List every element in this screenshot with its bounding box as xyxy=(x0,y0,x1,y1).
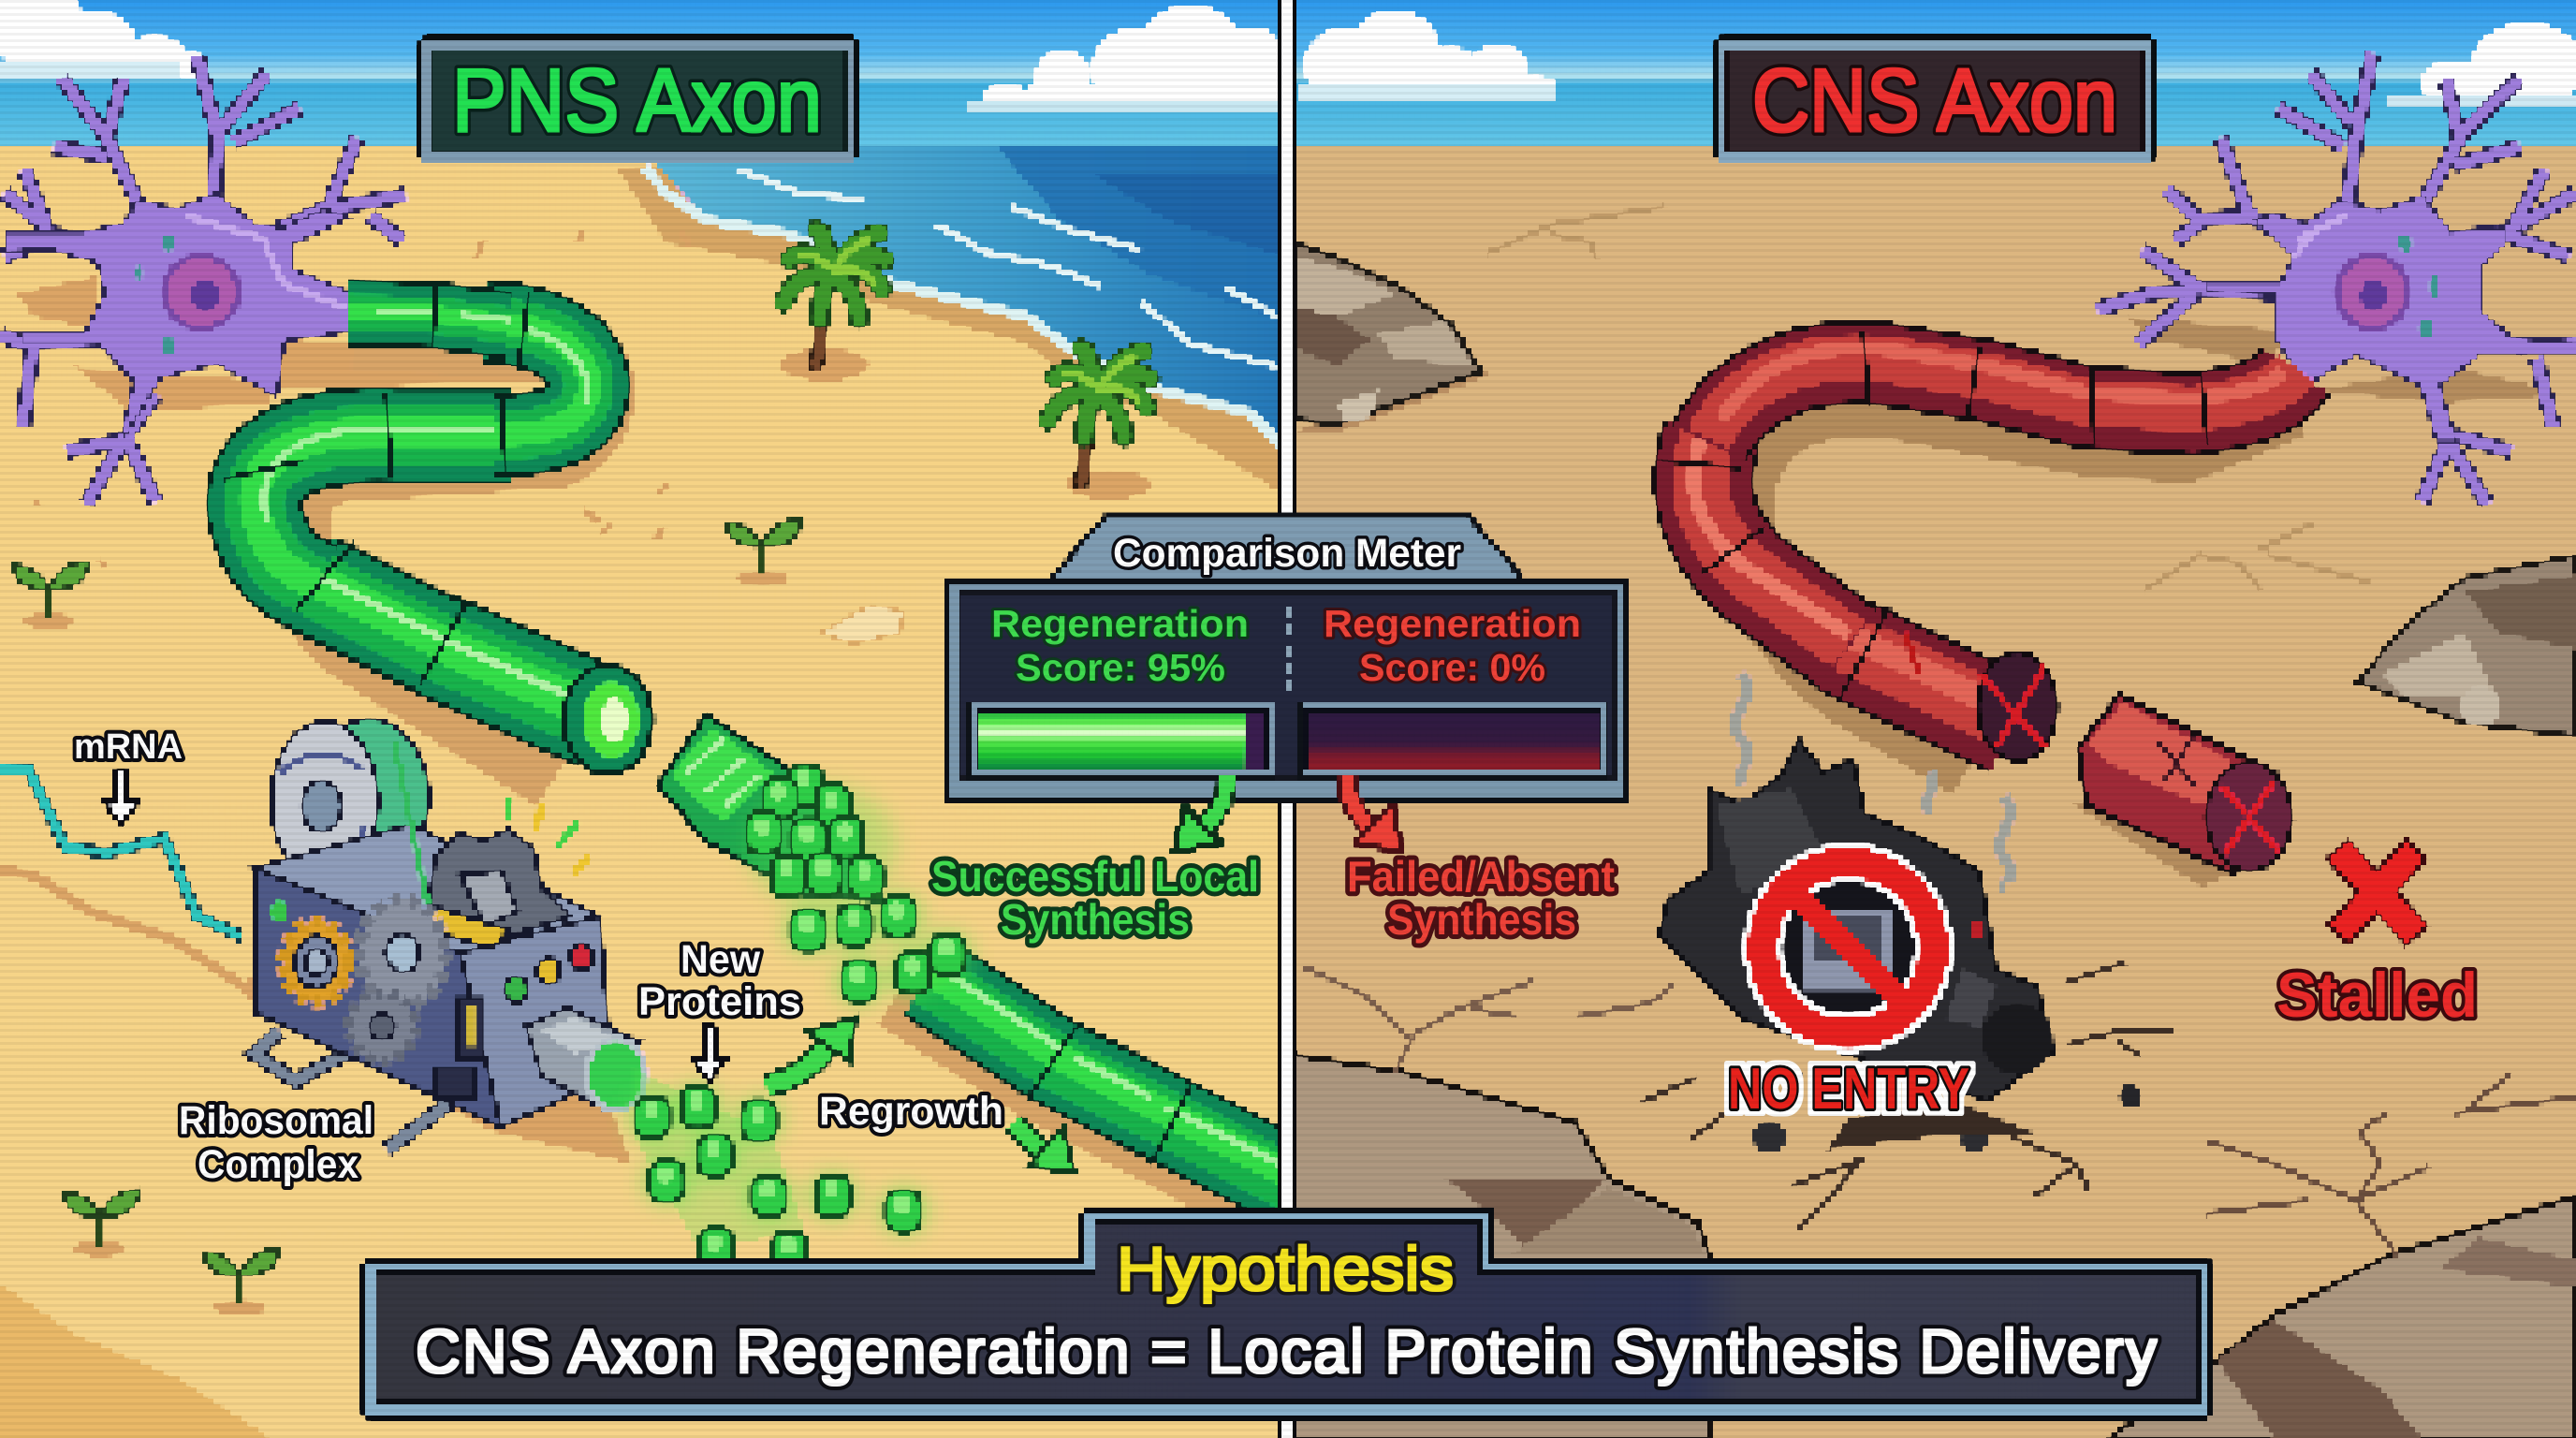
meter body xyxy=(946,579,1629,803)
icon: stalled red X xyxy=(2336,848,2418,936)
plate frame CNS xyxy=(1715,35,2157,165)
hypothesis statement: CNS Axon Regeneration = Local Protein Synthesis Delivery xyxy=(416,1316,2157,1386)
label: failed/absent synthesis: Failed/Absent xyxy=(1347,852,1615,901)
arrow: mRNA down xyxy=(104,770,139,826)
plate frame PNS xyxy=(418,35,858,165)
axon CNS shadow xyxy=(1737,402,2291,764)
axon CNS red segments xyxy=(1660,332,2296,761)
label: no entry: NO ENTRY xyxy=(1728,1057,1969,1122)
title plate: CNS Axon xyxy=(1715,35,2157,165)
arrow: proteins to axon curved xyxy=(766,1017,856,1086)
label: successful local synthesis: Successful Local xyxy=(931,852,1259,901)
label: stalled: Stalled xyxy=(2276,960,2478,1031)
panel: PNS beach scene xyxy=(0,0,1301,1438)
label: successful local synthesis xyxy=(931,852,1259,944)
label: complex: Complex xyxy=(198,1142,359,1187)
center divider xyxy=(1278,0,1296,1438)
label: proteins: Proteins xyxy=(638,979,801,1024)
banner frame xyxy=(361,1208,2215,1419)
PNS score: Score: 95% xyxy=(1016,646,1225,689)
sky and ocean horizon xyxy=(0,0,1280,146)
icon: no entry sign xyxy=(1743,843,1954,1053)
PNS score: Regeneration xyxy=(991,602,1249,645)
CNS scene artwork xyxy=(1288,0,2576,1438)
label: new: New xyxy=(681,937,761,982)
panel: comparison meter xyxy=(946,517,1629,803)
icon: smoke wisps xyxy=(1735,674,2011,888)
meter heading: Comparison Meter xyxy=(1113,531,1461,576)
PNS score xyxy=(991,602,1249,689)
dry sand xyxy=(1295,144,2576,1438)
label: ribosomal complex: Ribosomal xyxy=(179,1098,373,1143)
CNS score: Score: 0% xyxy=(1359,646,1545,689)
panel: hypothesis banner xyxy=(361,1208,2215,1419)
label: regrowth: Regrowth xyxy=(819,1089,1003,1134)
CNS score xyxy=(1324,602,1581,689)
label: successful local synthesis: Synthesis xyxy=(1001,895,1190,944)
sand xyxy=(0,144,1280,1438)
arrow: to successful synthesis xyxy=(1174,775,1227,852)
title plate: PNS Axon: PNS Axon xyxy=(452,51,822,151)
clouds right xyxy=(1300,9,2576,109)
label: failed/absent synthesis: Synthesis xyxy=(1387,895,1576,944)
PNS scene artwork xyxy=(0,0,1301,1438)
mRNA strand xyxy=(0,770,242,937)
icon: ribosomal complex machine xyxy=(246,719,646,1164)
broken axon end with protein cluster xyxy=(657,714,897,909)
label: failed/absent synthesis xyxy=(1347,852,1615,944)
ocean xyxy=(616,144,1288,491)
CNS meter bar 0% xyxy=(1299,702,1607,779)
axon PNS green tube xyxy=(222,283,652,774)
protein beam and stream xyxy=(629,894,971,1275)
sky right xyxy=(1295,0,2576,146)
palm trees xyxy=(13,230,1151,1316)
sand path and lower shading xyxy=(0,871,271,1438)
CNS score: Regeneration xyxy=(1324,602,1581,645)
banner heading: Hypothesis xyxy=(1117,1234,1454,1303)
label: mRNA: mRNA xyxy=(74,727,183,767)
severed axon fragment xyxy=(2073,695,2291,888)
neuron PNS xyxy=(0,55,559,505)
arrow: new proteins down xyxy=(692,1026,726,1082)
neuron CNS xyxy=(2097,52,2576,505)
panel: CNS desert scene xyxy=(1288,0,2576,1438)
icon: destroyed machine xyxy=(1660,740,2143,1153)
arrow: regrowth xyxy=(1013,1122,1075,1172)
clouds left xyxy=(0,0,1289,113)
divider dashes xyxy=(1284,607,1290,700)
rock right xyxy=(2357,555,2576,736)
sprouts xyxy=(13,562,89,629)
sand specks xyxy=(33,230,688,568)
meter frame and bars xyxy=(946,517,1629,803)
boulders and rock plates xyxy=(1296,206,2372,592)
arrow: to failed synthesis xyxy=(1347,775,1401,852)
PNS meter bar 95% xyxy=(970,702,1275,779)
title plate: CNS Axon: CNS Axon xyxy=(1752,51,2117,151)
meter tab xyxy=(1048,517,1526,582)
regrowing axon tube xyxy=(901,966,1301,1208)
